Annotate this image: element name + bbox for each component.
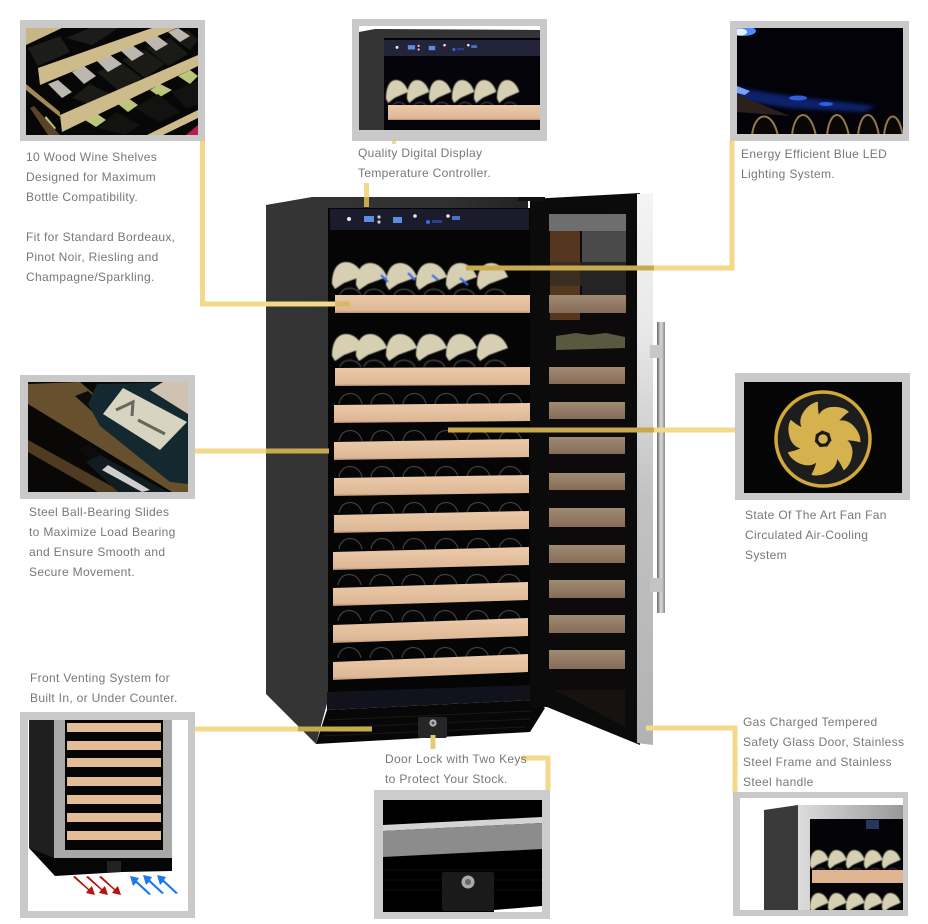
caption: front venting: Built In, or Under Counter. [30,691,178,705]
cooler interior [328,208,532,698]
caption: glass door: Steel Frame and Stainless [743,755,892,769]
caption: wood shelves: 10 Wood Wine Shelves [26,150,157,164]
panel: glass door photo [733,792,908,916]
connector: glass door [646,728,735,795]
caption: ball-bearing slides: to Maximize Load Bearing [29,525,176,539]
caption: digital display [358,146,491,180]
caption: glass door [743,715,904,789]
door glass view [549,212,626,727]
door handle [650,322,665,613]
caption: front venting: Front Venting System for [30,671,170,685]
caption: digital display: Temperature Controller. [358,166,491,180]
caption: wood shelves: Designed for Maximum [26,170,156,184]
icon: blue intake arrows [130,875,178,895]
caption: glass door: Safety Glass Door, Stainless [743,735,904,749]
connector: digital display [364,140,396,207]
caption: glass door: Gas Charged Tempered [743,715,877,729]
panel: blue LED photo [730,21,909,141]
open glass door frame [530,193,640,745]
caption: door lock: to Protect Your Stock. [385,772,508,786]
caption: wood shelves: Pinot Noir, Riesling and [26,250,159,264]
dark bottle rows [338,394,522,658]
caption: wood shelves: Fit for Standard Bordeaux, [26,230,175,244]
caption: glass door: Steel handle [743,775,814,789]
caption: wood shelves: Bottle Compatibility. [26,190,138,204]
caption: blue LED [741,147,887,181]
icon: red exhaust arrows [73,876,121,895]
stainless door strip [637,193,653,745]
icon: gold fan [776,392,870,486]
bottles on second shelf [332,334,508,367]
caption: fan: Circulated Air-Cooling [745,528,868,542]
caption: door lock: Door Lock with Two Keys [385,752,527,766]
caption: ball-bearing slides: Secure Movement. [29,565,135,579]
caption: fan [745,508,887,562]
cooler cabinet side and top [266,197,528,744]
caption: blue LED: Energy Efficient Blue LED [741,147,887,161]
connector: blue LED [466,140,732,268]
caption: front venting [30,671,178,705]
caption: door lock [385,752,527,786]
caption: fan: State Of The Art Fan Fan [745,508,887,522]
panel: door lock photo [374,790,550,919]
caption: ball-bearing slides [29,505,176,579]
plinth grille [316,700,545,744]
caption: ball-bearing slides: Steel Ball-Bearing Slides [29,505,169,519]
caption: blue LED: Lighting System. [741,167,835,181]
connector: ball-bearing slides [195,448,329,454]
panel: digital display photo [352,19,547,141]
connector: wood shelves [202,139,350,304]
panel: wood shelves photo [20,20,205,141]
panel: fan photo [735,373,910,500]
connector: door lock [433,735,548,790]
caption: digital display: Quality Digital Display [358,146,482,160]
connector: fan [448,428,735,432]
panel: front venting photo [20,712,195,918]
panel: ball-bearing slides photo [20,375,195,499]
door hinge [518,197,545,201]
caption: ball-bearing slides: and Ensure Smooth and [29,545,165,559]
icon: vent lock [107,861,121,872]
digital control panel [330,209,529,230]
wood shelves [333,295,530,680]
caption: fan: System [745,548,787,562]
bottles on top shelf [332,262,508,296]
panel: wine cooler [266,193,665,745]
door lock [418,717,447,738]
connector: front venting [195,726,372,732]
caption: wood shelves: Champagne/Sparkling. [26,270,155,284]
caption: wood shelves [26,150,175,284]
front base frame [327,685,533,710]
